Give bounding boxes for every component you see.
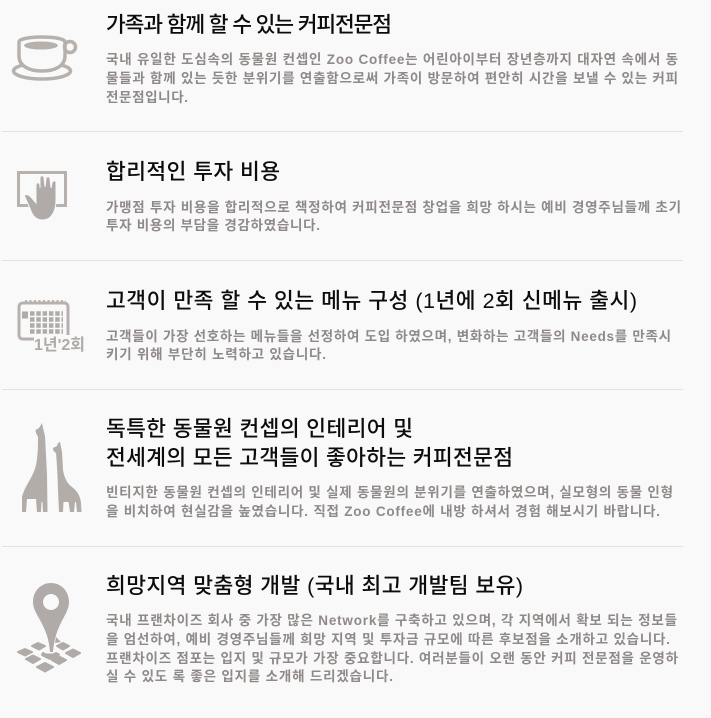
heading: 합리적인 투자 비용 (106, 160, 280, 184)
panel: menu composition (19, 289, 671, 362)
text block: 국내 유일한 도심속의 동물원 컨셉인 Zoo Coffee는 어린아이부터 장년층까지 대자연 속에서 동 (106, 52, 678, 67)
text block: 물들과 함께 있는 듯한 분위기를 연출함으로써 가족이 방문하여 편안히 시간을 보낼 수 있는 커피 (106, 71, 678, 86)
text block (106, 612, 679, 684)
text block (106, 329, 671, 362)
heading: 전세계의 모든 고객들이 좋아하는 커피전문점 (106, 446, 513, 470)
text block: 투자 비용의 부담을 경감하였습니다. (106, 218, 320, 233)
text block: 고객들이 가장 선호하는 메뉴들을 선정하여 도입 하였으며, 변화하는 고객들의 Needs를 만족시 (106, 329, 671, 344)
heading: 희망지역 맞춤형 개발 (국내 최고 개발팀 보유) (106, 574, 523, 598)
text block: 가맹점 투자 비용을 합리적으로 책정하여 커피전문점 창업을 희망 하시는 예비 경영주님들께 초기 (106, 200, 681, 215)
panel: regional development (18, 574, 679, 684)
text block (106, 200, 681, 233)
text block (106, 52, 678, 105)
icon: coffee cup (14, 37, 76, 79)
text block: 전문점입니다. (106, 90, 188, 105)
panel: zoo concept interior (22, 417, 673, 519)
text block: 빈티지한 동물원 컨셉의 인테리어 및 실제 동물원의 분위기를 연출하였으며, 실모형의 동물 인형 (106, 485, 673, 500)
heading: 독특한 동물원 컨셉의 인테리어 및 (106, 417, 413, 441)
heading (106, 417, 513, 470)
text block: 을 엄선하여, 예비 경영주님들께 희망 지역 및 투자금 규모에 따른 후보점을 소개하고 있습니다. (106, 632, 670, 647)
panel: reasonable investment (18, 160, 681, 233)
text block: 프랜차이즈 점포는 입지 및 규모가 가장 중요합니다. 여러분들이 오랜 동안 커피 전문점을 운영하 (106, 651, 679, 666)
icon: map pin (18, 583, 80, 672)
icon: hand on tablet (18, 172, 66, 220)
panel: family coffee shop (14, 13, 678, 105)
text block: 국내 프랜차이즈 회사 중 가장 많은 Network를 구축하고 있으며, 각 지역에서 확보 되는 정보들 (106, 612, 677, 628)
text block: 실 수 있도 록 좋은 입지를 소개해 드리겠습니다. (106, 669, 393, 684)
text block: 을 비치하여 현실감을 높였습니다. 직접 Zoo Coffee에 내방 하셔서 경험 해보시기 바랍니다. (106, 504, 660, 519)
icon: calendar (19, 302, 85, 354)
heading: 고객이 만족 할 수 있는 메뉴 구성 (1년에 2회 신메뉴 출시) (106, 289, 637, 313)
icon label: 1년'2회 (34, 336, 85, 354)
text block: 키기 위해 부단히 노력하고 있습니다. (106, 347, 326, 362)
icon: giraffes (22, 423, 82, 512)
heading: 가족과 함께 할 수 있는 커피전문점 (106, 13, 392, 37)
text block (106, 485, 673, 519)
